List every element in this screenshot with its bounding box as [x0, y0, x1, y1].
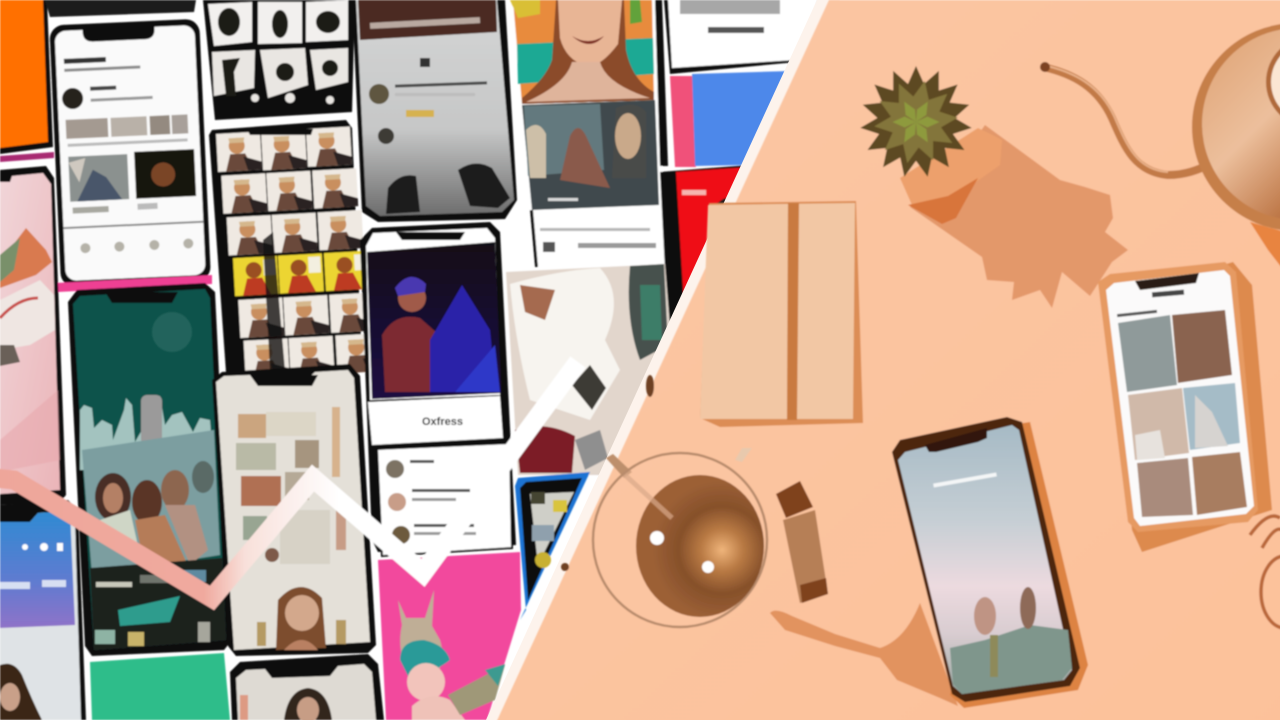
- chat avatars: [386, 460, 410, 544]
- phone: comic tile grid: [209, 120, 381, 380]
- succulent shadow: [910, 125, 1128, 308]
- panel: phone collage: [0, 0, 822, 720]
- glass cup: [593, 448, 767, 627]
- gallery thumbnails: [236, 407, 346, 564]
- notch: [105, 292, 178, 303]
- photo: dark portrait: [134, 149, 196, 199]
- panel: peach flat-lay: [495, 0, 1280, 720]
- phone: lock screen phone: [892, 417, 1088, 708]
- phone: blue app screen: [0, 500, 86, 720]
- arrow: trend line: [0, 362, 578, 598]
- photo: group: [68, 154, 129, 202]
- caption panel: [368, 396, 503, 445]
- kettle spout opening: [1040, 62, 1050, 72]
- video frame: [522, 100, 659, 210]
- photo: white fluffy collage: [506, 264, 672, 475]
- phone: bottom selfie: [230, 654, 384, 720]
- woman portrait: [522, 0, 654, 104]
- panel: green tile: [90, 653, 230, 720]
- notch: [925, 428, 987, 452]
- avatar: [62, 88, 84, 110]
- plants at base: [950, 587, 1072, 694]
- comment avatar: [378, 128, 394, 144]
- notch: [247, 129, 313, 135]
- kettle body: [1192, 23, 1280, 231]
- phone: white social feed: [49, 19, 211, 287]
- phone: pastel illustration: [0, 166, 66, 505]
- panel: pink character tile: [378, 552, 521, 720]
- notebook: [700, 201, 863, 427]
- small crumb marks: [561, 375, 654, 571]
- phone: chat comments: [377, 443, 512, 556]
- character illustration: [398, 590, 505, 720]
- divider: white diagonal band: [486, 0, 840, 720]
- group of people: [95, 461, 214, 570]
- notch: [1135, 273, 1199, 290]
- selfie portrait: [257, 587, 346, 650]
- phone: right gallery phone: [1098, 262, 1272, 552]
- accent: pink strip under feed: [56, 275, 212, 292]
- caption text: Oxfress: [422, 416, 463, 428]
- phone: dark top sliver: [45, 0, 196, 17]
- phone: teal group poster: [68, 283, 232, 656]
- dark lower scene: [90, 558, 226, 650]
- panel: pink and blue tile: [670, 71, 790, 167]
- gallery heading: [1152, 290, 1184, 297]
- neon figure: [382, 277, 500, 392]
- phone: grey comments screen: [352, 0, 517, 222]
- silhouette pair: [386, 163, 510, 214]
- caption lines: [540, 228, 650, 231]
- photo grid: [1118, 310, 1247, 517]
- chat lines: [410, 460, 476, 535]
- succulent plant: [859, 66, 973, 179]
- skyline: [80, 396, 214, 470]
- thumbnails strip: [66, 114, 188, 139]
- nav icons: [80, 238, 194, 253]
- comment avatar: [369, 84, 389, 104]
- accent: pink strip left: [0, 152, 54, 162]
- phone: portrait and video: [510, 0, 668, 267]
- phone: blue framed gallery: [515, 472, 590, 620]
- kettle shadow: [1250, 222, 1280, 272]
- person with dark hair: [0, 664, 42, 720]
- charging cable: [1250, 516, 1280, 628]
- phone and cup shadows: [770, 603, 958, 706]
- sunglasses arm: [776, 481, 828, 603]
- succulent pot: [900, 128, 1002, 224]
- phone: red screen: [660, 165, 750, 345]
- phone: orange screen: [0, 0, 53, 154]
- panel: white collage background: [0, 0, 840, 720]
- notch: [250, 375, 318, 386]
- notch: [396, 232, 465, 240]
- phone: neon portrait: [360, 222, 516, 552]
- notch: [82, 25, 155, 42]
- phone: black and white tile grid: [203, 0, 355, 120]
- brown header image: [358, 0, 497, 40]
- phone: beige gallery and selfie: [212, 364, 376, 656]
- feed heading: [64, 57, 106, 64]
- kettle spout: [1043, 65, 1210, 175]
- phone: white top right: [664, 0, 822, 74]
- mountain painting: [0, 228, 55, 366]
- lock screen text: [933, 472, 997, 488]
